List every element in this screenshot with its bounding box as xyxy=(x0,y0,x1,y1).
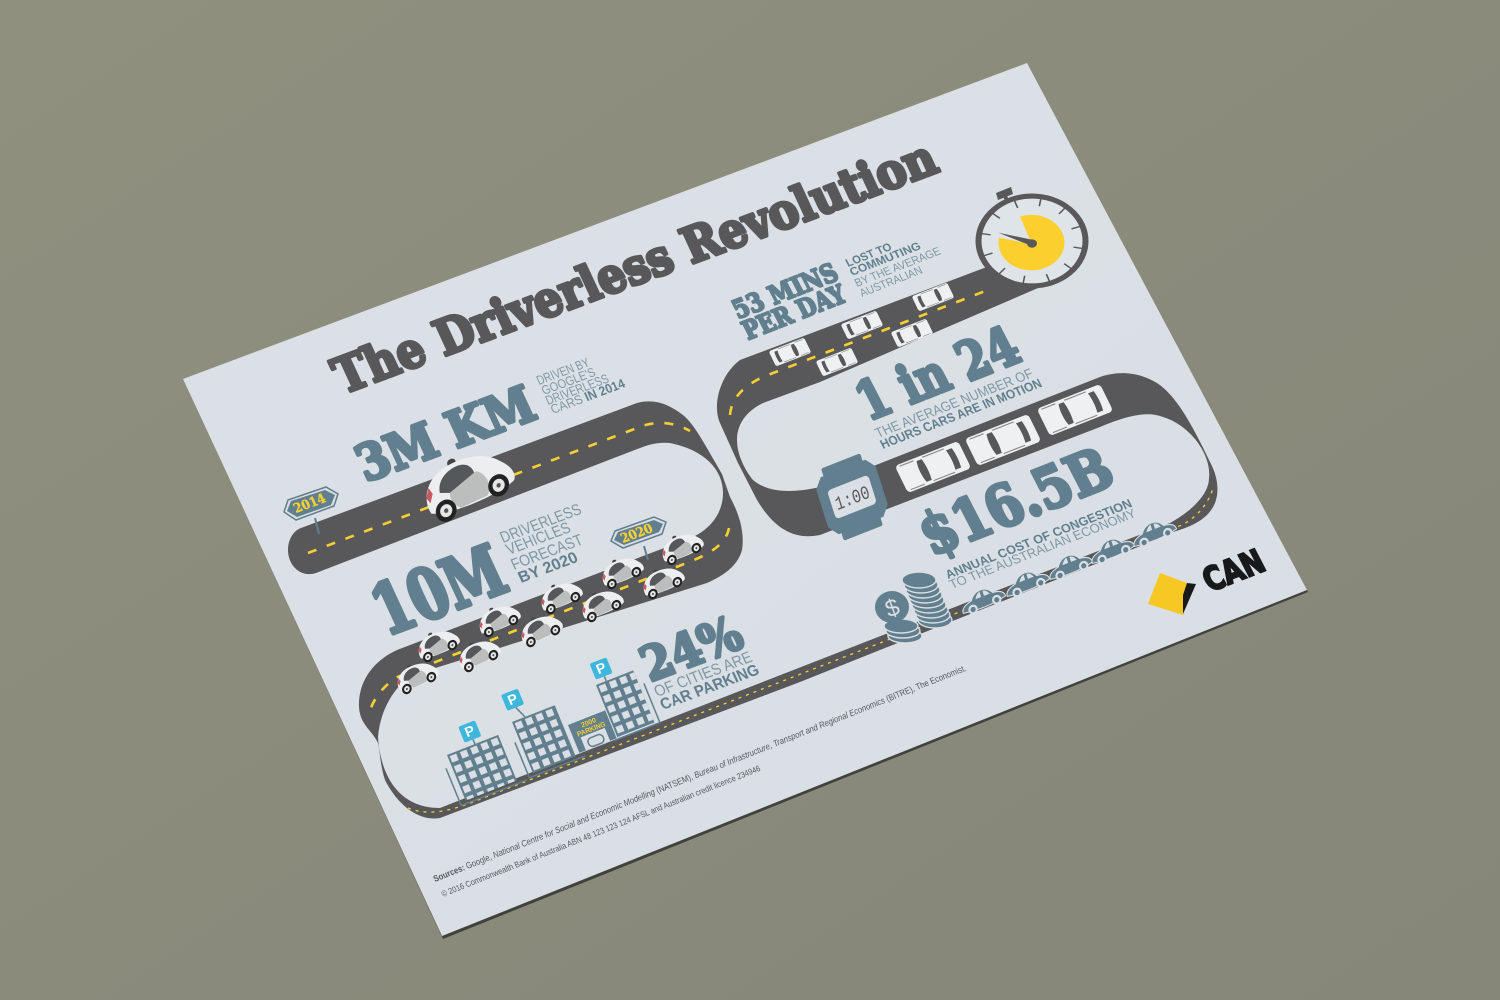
stat: 10M: BY 2020 xyxy=(516,549,581,587)
stat: 53 mins per day: COMMUTING xyxy=(848,241,923,279)
building two with parking sign: P xyxy=(505,690,520,708)
stopwatch xyxy=(978,196,1086,286)
stat: $16.5B: $16.5B xyxy=(907,435,1124,568)
stat: 10M: FORECAST xyxy=(509,532,586,574)
stat: 3M KM: CARS IN 2014 xyxy=(548,376,628,417)
stopwatch crown xyxy=(996,187,1013,205)
building one with parking sign: P xyxy=(462,722,477,740)
stat: 1 in 24: 1 in 24 xyxy=(845,314,1030,433)
road dashes: first stretch xyxy=(308,423,690,553)
stat: 10M: 10M xyxy=(358,529,519,651)
watch icon: 1:00 xyxy=(833,482,873,516)
road ribbon xyxy=(288,262,1217,818)
stat: 53 mins per day: LOST TO xyxy=(844,241,894,270)
stat: 3M KM: DRIVERLESS xyxy=(543,371,611,408)
stat: 10M: VEHICLES xyxy=(504,520,573,559)
stat: 1 in 24: HOURS CARS ARE IN MOTION xyxy=(877,376,1044,452)
dollar coin xyxy=(875,591,909,623)
parking garage xyxy=(568,710,617,753)
stat: 53 mins per day xyxy=(727,241,943,346)
driverless car xyxy=(419,438,519,527)
stat: 3M KM: DRIVEN BY xyxy=(534,355,592,388)
parking garage: PARKING xyxy=(576,721,607,739)
building one with parking sign xyxy=(433,711,527,806)
stat: 10M: DRIVERLESS xyxy=(498,501,584,547)
large white cars on middle road xyxy=(895,384,1113,493)
stat: $16.5B: TO THE AUSTRALIAN ECONOMY xyxy=(946,506,1139,592)
paper sheet xyxy=(183,63,1308,939)
title: The Driverless Revolution xyxy=(324,129,946,405)
stat: $16.5B: ANNUAL COST OF CONGESTION xyxy=(943,497,1134,582)
sign: 2014 xyxy=(284,487,338,534)
road dashes: top stretch xyxy=(730,288,993,415)
stat: 1 in 24: THE AVERAGE NUMBER OF xyxy=(872,365,1036,441)
stat: 53 mins per day: PER DAY xyxy=(737,280,852,346)
watch icon xyxy=(811,449,893,545)
sign: 2014: 2014 xyxy=(291,491,329,517)
building three with parking sign xyxy=(584,648,660,740)
building three with parking sign: P xyxy=(594,659,608,677)
sources footnote: © 2016 Commonwealth Bank of Australia ABN 48 123 123 124 AFSL and Australian credit licence 234946 xyxy=(440,763,762,899)
road dashes: second stretch xyxy=(369,528,729,715)
sign: 2020 xyxy=(611,517,666,560)
stopwatch elapsed sector xyxy=(998,215,1064,270)
stat: 3M KM: GOOGLE'S xyxy=(539,364,598,398)
sign: 2020: 2020 xyxy=(618,521,656,547)
stat: 53 mins per day: 53 MINS xyxy=(727,258,844,325)
fleet of driverless cars xyxy=(394,526,706,697)
stat: 53 mins per day: BY THE AVERAGE xyxy=(853,246,943,290)
logo xyxy=(1148,542,1271,615)
sources footnote: Sources: Google, National Centre for Social and Economic Modelling (NATSEM), Bureau of Infrastructure, Transport and Regional Economics (BITRE), The Economist. xyxy=(432,663,968,884)
road dashes: thin stretch xyxy=(408,488,1213,812)
stopwatch hand xyxy=(998,233,1034,246)
stat: 24%: CAR PARKING xyxy=(658,662,762,714)
coin stacks xyxy=(884,572,952,643)
parking garage: 2000 xyxy=(580,717,598,729)
logo: CAN xyxy=(1196,542,1271,599)
stat: 3M KM: 3M KM xyxy=(346,375,544,493)
stat: 24%: 24% xyxy=(632,606,752,693)
building two with parking sign xyxy=(496,675,585,778)
dollar coin: $ xyxy=(882,593,903,623)
small white cars on top road xyxy=(769,283,954,376)
blue cars in congestion xyxy=(959,515,1178,618)
stat: 1 in 24 xyxy=(845,314,1044,452)
stat: 53 mins per day: AUSTRALIAN xyxy=(858,265,925,300)
stat: 24%: OF CITIES ARE xyxy=(652,649,755,701)
